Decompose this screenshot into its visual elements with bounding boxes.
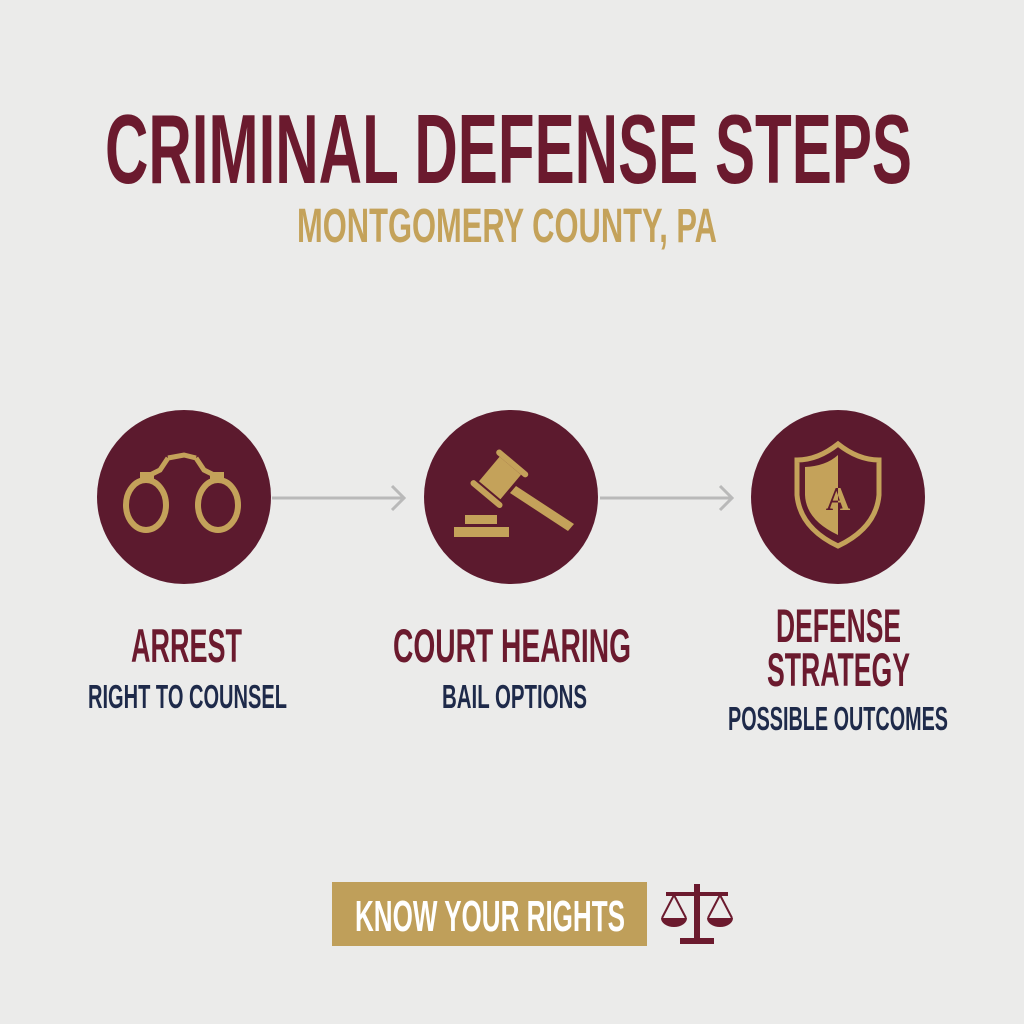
icon: gavel [424,410,598,584]
subtitle: MONTGOMERY COUNTY, PA [297,200,717,253]
step 2: court hearing [393,410,631,715]
banner: know your rights: KNOW YOUR RIGHTS [355,892,625,941]
label: defense strategy: STRATEGY [767,643,910,696]
icon: scales [661,884,733,944]
sublabel: bail options: BAIL OPTIONS [442,678,587,715]
label: arrest: ARREST [131,619,242,672]
step 3: defense strategy [728,410,948,737]
sublabel: right to counsel: RIGHT TO COUNSEL [88,678,287,715]
arrow 1 [272,486,404,510]
icon: handcuffs [97,410,271,584]
step 1: arrest [88,410,287,715]
label: defense strategy [767,599,910,696]
label: defense strategy: DEFENSE [776,599,901,652]
arrow 2 [600,486,732,510]
label: court hearing: COURT HEARING [393,619,631,672]
banner: know your rights [332,882,647,946]
icon: shield: A [826,481,851,518]
icon: shield: A [826,481,851,518]
icon: shield [751,410,925,584]
